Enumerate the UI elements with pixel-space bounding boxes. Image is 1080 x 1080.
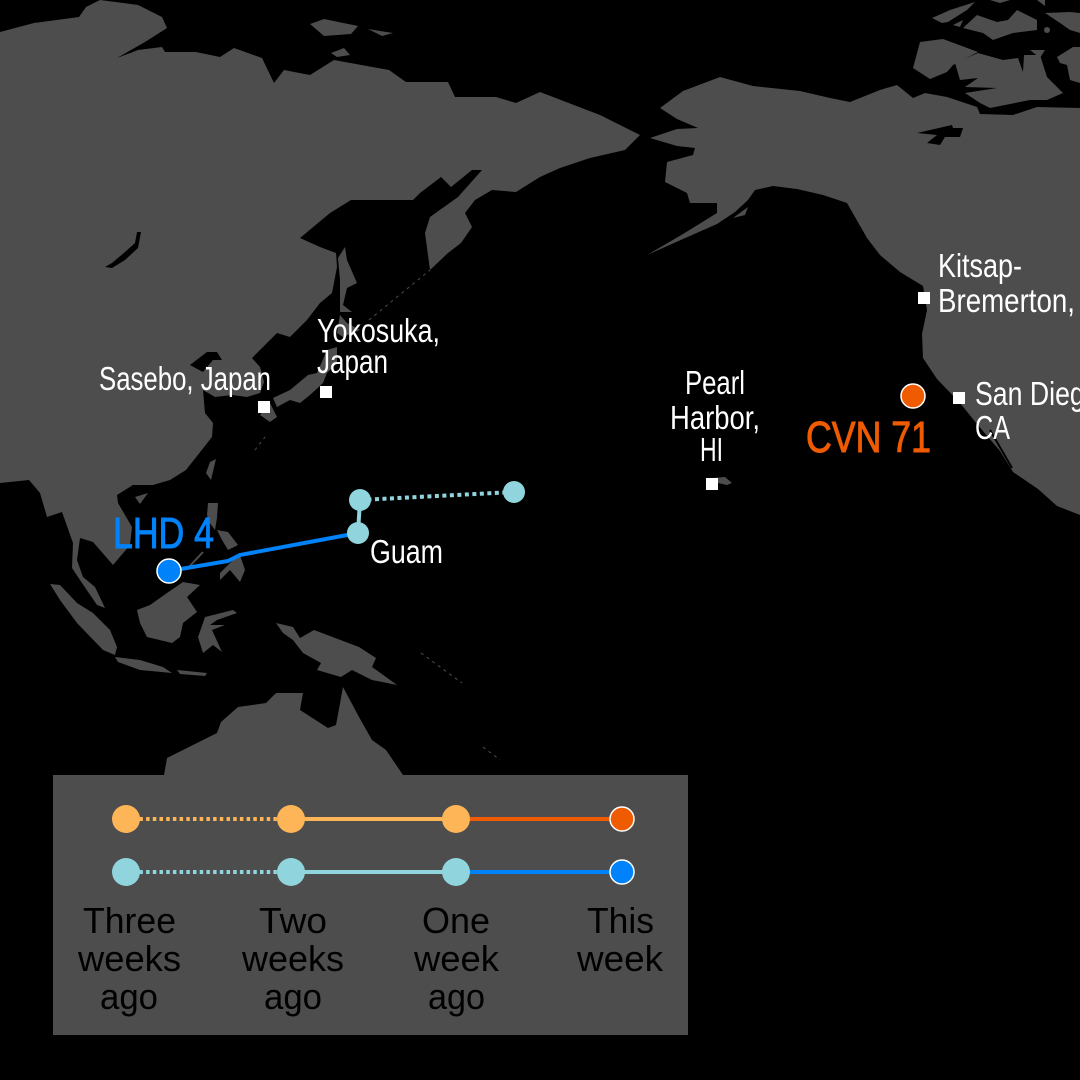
land: Visayas [217,530,238,550]
land: Kyushu [260,403,277,422]
land: Sulawesi [198,610,237,653]
legend label: this week: week [576,938,664,979]
label: Pearl Harbor: HI [700,431,723,468]
marker: one week ago, Guam [347,522,369,544]
map labels [99,247,1080,570]
panel: legend [53,775,688,1035]
legend label: one week ago: ago [428,976,485,1017]
land: Sumatra [50,584,117,655]
port marker: Pearl Harbor [706,478,718,490]
port marker: Yokosuka [320,386,332,398]
map: land masses [0,0,1080,775]
ship label: CVN 71: CVN 71 [806,413,931,462]
land: Sakhalin [338,247,357,312]
land: North America [647,77,1080,515]
legend label: one week ago: week [413,938,500,979]
land: Mindanao [220,555,245,582]
label: San Diego: CA [975,409,1010,446]
legend label: two weeks ago [241,900,344,1017]
land: Honshu [273,347,337,407]
marker: three weeks ago [503,481,525,503]
legend label: two weeks ago: ago [264,976,322,1017]
label: Kitsap-Bremerton [938,247,1075,319]
label: Yokosuka [317,312,440,380]
legend label: three weeks ago [77,900,181,1017]
label: Pearl Harbor: Pearl [685,364,745,401]
legend label: this week: This [587,900,654,941]
map: lakes and channels [105,125,1012,468]
legend: carrier row [112,805,634,833]
label: Yokosuka: Japan [317,343,388,380]
map: thin island chains [188,270,500,760]
legend background [53,775,688,1035]
label: San Diego [975,375,1080,446]
route segment: three weeks ago (dotted) [360,492,514,500]
land: Hawaii [705,477,732,485]
label: Kitsap-Bremerton: Kitsap- [938,247,1022,284]
legend label: three weeks ago: weeks [77,938,181,979]
label: Yokosuka: Yokosuka, [317,312,440,349]
port marker: San Diego [953,392,965,404]
route segment: two weeks ago [358,500,360,533]
land: Taiwan [206,459,216,480]
route segment: this week [169,533,358,571]
legend label: this week [576,900,664,979]
land: Hokkaido [337,315,360,337]
legend label: three weeks ago: ago [100,976,158,1017]
land: Australia [164,687,403,775]
ship label: LHD 4: LHD 4 [113,509,214,558]
route: USS LHD 4 [169,492,514,571]
legend label: two weeks ago: weeks [241,938,344,979]
legend label: one week ago [413,900,500,1017]
label: Pearl Harbor [670,364,760,468]
land: Luzon [207,503,218,530]
legend label: one week ago: One [422,900,490,941]
land: Arctic islands [310,0,1080,108]
marker: CVN 71 this week [901,384,925,408]
land: Borneo [137,582,200,643]
marker: LHD 4 this week [157,559,181,583]
land: Eurasia [0,0,640,608]
marker: two weeks ago [349,489,371,511]
legend label: three weeks ago: Three [83,900,176,941]
land: New Guinea [276,623,397,685]
land: Hainan [135,493,148,504]
land: Kodiak [733,207,748,218]
legend: amphibious row [112,858,634,886]
label: Guam: Guam [370,533,443,570]
label: Sasebo: Sasebo, Japan [99,360,271,397]
legend label: two weeks ago: Two [259,900,327,941]
label: Pearl Harbor: Harbor, [670,399,760,436]
port marker: Kitsap-Bremerton [918,292,930,304]
land: Java [115,657,172,673]
port marker: Sasebo [258,401,270,413]
land: Lesser Sunda [177,670,207,676]
